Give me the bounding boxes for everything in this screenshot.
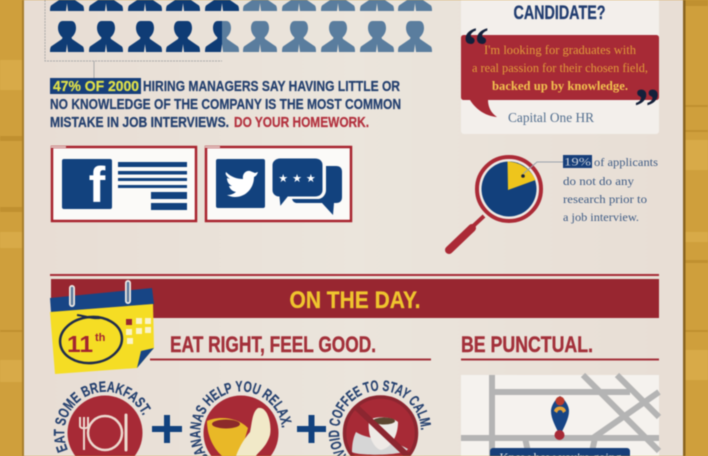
panel: candidate quote: ” [634, 79, 660, 136]
banner: on the day [50, 274, 659, 318]
card: Facebook [51, 147, 196, 221]
statistic text: 47% of 2000: HIRING MANAGERS SAY HAVING LITTLE OR [143, 78, 400, 95]
quote text: a real passion for their chosen field, [472, 61, 648, 75]
icon: calendar 11th: th [95, 332, 106, 344]
icon: plate, eat some breakfast: EAT SOME BREAKFAST. [53, 380, 152, 454]
icon: location pin [551, 396, 569, 440]
heading: be punctual: BE PUNCTUAL. [461, 332, 593, 357]
icon: speech bubbles: ★★★ [278, 172, 320, 185]
icon: Facebook f: f [89, 157, 106, 213]
banner: on the day: ON THE DAY. [290, 287, 420, 314]
icon: Twitter bird [226, 171, 258, 197]
icon: plus [297, 415, 326, 443]
quote text [472, 43, 648, 93]
statistic text: 19% of applicants [563, 154, 658, 224]
statistic text: 19% of applicants: 19% [564, 154, 591, 168]
pictogram: 47% of hiring managers [45, 0, 432, 78]
statistic text: 19% of applicants: a job interview. [563, 210, 639, 224]
icon: calendar 11th [50, 283, 154, 374]
panel: candidate quote [461, 0, 660, 136]
quote text: backed up by knowledge. [492, 79, 628, 93]
statistic text: 47% of 2000: MISTAKE IN JOB INTERVIEWS. [50, 114, 229, 131]
heading: eat right: EAT RIGHT, FEEL GOOD. [170, 332, 376, 357]
attribution: Capital One HR [508, 110, 594, 125]
quote text: I'm looking for graduates with [484, 43, 637, 57]
icon: speech bubbles [272, 158, 342, 215]
label: map caption [490, 448, 630, 456]
icon: calendar 11th: 11 [67, 331, 93, 357]
map: route to the interview [461, 375, 659, 456]
statistic text: 19% of applicants: research prior to [563, 192, 647, 206]
statistic text: 19% of applicants: of applicants [594, 155, 658, 169]
quote marks: “ [463, 18, 489, 75]
speech bubble [461, 35, 659, 117]
icon: plus [152, 415, 182, 443]
magnifying glass pie chart: 19% [449, 157, 563, 250]
card: Twitter [205, 147, 351, 221]
statistic text: 47% of 2000: 47% OF 2000 [53, 78, 139, 95]
heading: CANDIDATE? [514, 3, 606, 24]
statistic text: 47% of 2000 [50, 78, 401, 131]
statistic text: 47% of 2000: NO KNOWLEDGE OF THE COMPANY IS THE MOST COMMON [50, 96, 401, 113]
statistic text: 19% of applicants: do not do any [563, 174, 634, 188]
statistic text: 47% of 2000: DO YOUR HOMEWORK. [234, 114, 369, 131]
